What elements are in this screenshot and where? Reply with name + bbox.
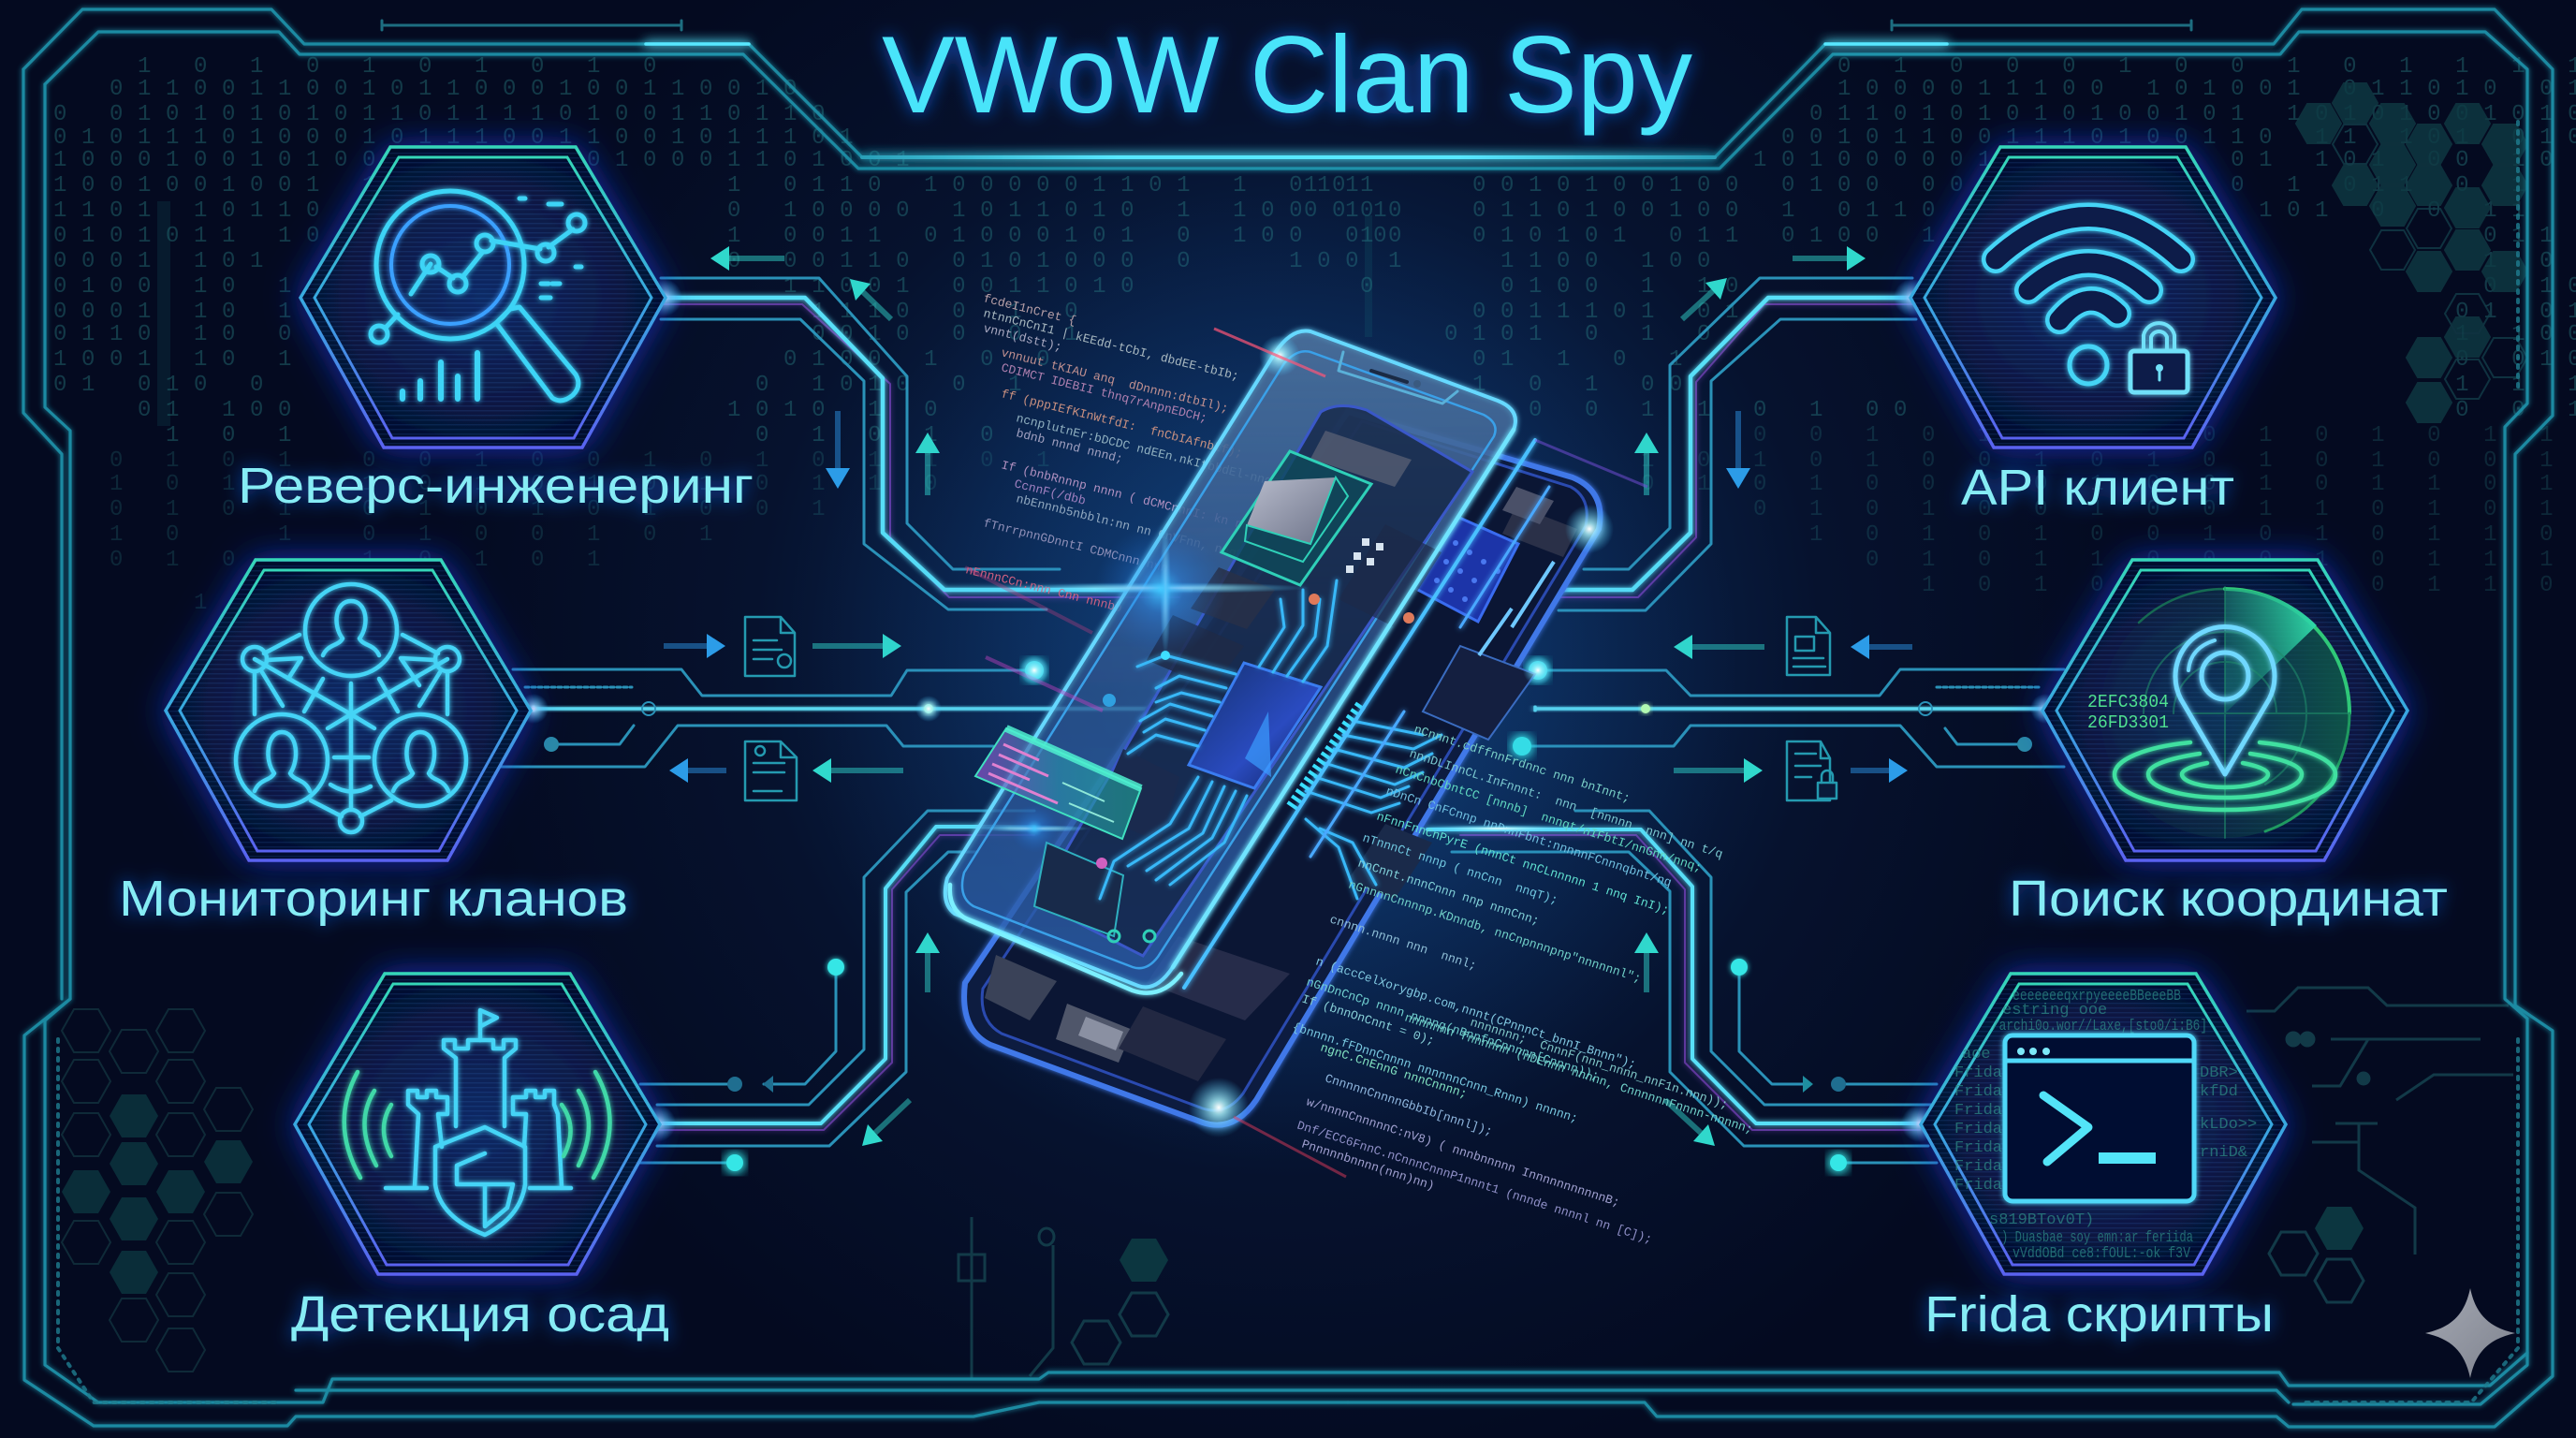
code text left of phone: CcnnF(/dbb [1013,477,1087,508]
hexagon pattern: top right [2296,83,2527,422]
code text left of phone: ff (pppIEfKInWtfdI: fnCbIAfnbIf); [1000,387,1244,461]
code text right of phone: nGnnnnCnnnnp.KDnndb, nnCnpnnnpnp"nnnnnnl"; [1347,878,1643,986]
binary data background: left: 0 1 0 1 0 0 1 0 0 1 0 1 0 1 1 0 1 [53,448,1064,474]
binary data background: right: 0011101 01 01 01 [1304,300,2576,325]
code text right of phone: nTnnnCt nnnp ( nnCnn nnqT); [1361,831,1559,907]
code text right of phone: {bnnnn.fFDnnCnnnn nnnnnnCnnn_Rnnn) nnnnn; [1291,1020,1580,1126]
dim code behind terminal: eeeeeeeqxrpyeeeeBBeeeBB [2012,988,2181,1005]
connector: bottom left [640,811,1034,1171]
code text right of phone: nFnnFnnCnPyrE (nnnCt nnCLnnnnn 1 nnq InI); [1375,810,1671,917]
dim code behind terminal: Frida [1954,1139,2002,1157]
dim code behind terminal: kfDd [2200,1083,2238,1101]
top deco bars [382,21,2191,30]
glow columns in data rain [157,201,1372,426]
hexagon: Реверс-инженеринг [300,147,666,448]
binary data background: right: 1 0 1 00 1 1 1 [1304,373,2576,398]
binary data background: left: 0 01010101011011110100110110 [53,102,840,127]
dim code behind terminal: /archi0o.wor//Laxe,[sto0/i:B6] [1992,1018,2207,1035]
dim code behind terminal: Frida [1954,1083,2002,1101]
binary data background: left: 0110011001011000100110010 [53,77,812,102]
binary data background: right: 0 0100 1 10 0 10 [1304,274,2576,300]
binary data background: left: 1001001001 1 1 0110 1000001101 1 011 [53,173,1373,198]
label: Поиск координат: Поиск координат [2009,871,2448,927]
code text left of phone: ntnnCnCnI1 | kEEdd-tCbI, dbdEE-tbIb; [982,306,1240,384]
binary data background: left [53,54,1401,616]
back phone components [985,487,1577,1081]
screen notch and speaker [1339,352,1457,404]
label: Реверс-инженеринг: Реверс-инженеринг [238,458,754,514]
binary data background: left: 0 1 0 1 0 1 0 1 [53,548,615,573]
phone right bevel highlight [950,430,1549,993]
binary data background: left: 1 0 1 0 1 0 0 1 0 1 [53,522,727,548]
code text right of phone: nnnnnnn; CnnnF(nnn_nnnn_nnF1n.nnn)); [1469,1016,1730,1112]
binary data background: right: 0101 0 1 0 1 100 [1304,322,2576,347]
hex codes: 26FD3301 [2087,712,2169,733]
binary data background: left: 0100 10 1 11001 0011010 [53,274,1149,300]
hex codes [2087,692,2169,733]
dim code behind terminal: ) Duasbae soy emn:ar feriida [2001,1229,2193,1247]
icon: radar with map pin [2100,587,2349,838]
binary data background: left: 0110 10 0 0010 0 0 1 [53,322,1092,347]
code text left of phone: vnnuut tKIAU anq dDnnnn:dtbIl); [1000,345,1230,416]
title bar highlight [646,44,1947,157]
code text right of phone: CnnnnnCnnnnGbbIb[nnnl]); [1310,1067,1494,1138]
code text right of phone: nnCnnt.nnnCnnn nnp nnnCnn; [1356,857,1541,928]
title: VWoW Clan Spy [882,13,1692,136]
dim code behind terminal: rniD& [2200,1144,2247,1162]
dim code behind terminal: vVddOBd ce8:fOUL:-ok f3V [2012,1245,2191,1263]
back phone [964,412,1600,1125]
connector: top left [661,278,1191,609]
binary data background: right: 0 0 1 1 0 1 00 0 0 1 [1304,398,2576,423]
binary data background: right: 001011001110100110 11 101 010 [1304,125,2576,151]
binary data background: left: 1001 10 1 0100 1 0 0 [53,347,1064,373]
binary data background: left: 0101011 10 1 0011 01000101 0 100 00 [53,224,1401,249]
binary data background: left: 01 010 0 0 1010 0 1 [53,373,1036,398]
code text left of phone: bdnb nnnd nnnd; [1015,426,1124,466]
dim code behind terminal: Frida [1954,1158,2002,1176]
code text left of phone: nbEnnnb5nbbln:nn nn CnVFnn, nnqE-nn [1015,492,1266,567]
icon: terminal window [2005,1035,2194,1201]
hexagon: Поиск координат [2042,560,2408,860]
icon: magnifier with analytics [371,191,585,401]
hexagon: Мониторинг кланов [166,560,531,860]
hexagon: Детекция осад [295,974,660,1274]
binary data background: right: 0000 0110100100 1 0110 100 1 0 1 101 0 0 11 [1304,198,2539,224]
binary data background: left: 1 0 1 0 1 0 1 0 [53,423,1008,448]
binary data background: right [1304,54,2576,653]
top chip module [1222,451,1371,585]
code text right of phone: nGnDnCnCp nnnn nnnnq(nBnnfnCnnnnn[Cnnnn)); [1305,976,1601,1083]
binary data background: right: 101 0010100100 0100 0010011 10 0 1 011 0 1 [1304,173,2539,198]
code text left of phone: fcdeI1nCret { [982,291,1077,328]
code text right of phone: nnnnnnn fnnnnnn (nDEnnn nnnnn, CnnnnnnFnnnn-nnnnn; [1403,1011,1754,1137]
arrows around connectors [664,246,1912,1146]
label: Детекция осад: Детекция осад [291,1286,669,1343]
connector: top right [1559,278,1916,610]
dim code behind terminal [1954,988,2257,1263]
code text right of phone: nCnnnt.cdffnnFrdnnc nnn bnInnt; [1412,723,1632,806]
hexagon: Frida скрипты [1921,974,2286,1274]
connector: bottom right [1427,811,1937,1171]
decorative circuit: bottom middle [959,1217,1168,1379]
connector: middle left [501,661,1179,767]
code text left of phone: nEnnnCCn:nnn Cnn nnnbb [964,563,1123,615]
ambient phone glow [805,187,1741,1161]
icon: wifi with lock [1996,217,2188,392]
code text left of phone [964,291,1323,615]
front glass phone [945,330,1549,993]
dim code behind terminal: estring ooe [2002,1002,2107,1020]
dim code behind terminal: Frida [1954,1064,2002,1082]
connector: middle right [1513,661,2064,767]
binary data background: left: 0001 101 0 00110 0101000 0 100 [53,249,1373,274]
dim code behind terminal: kLDo>> [2200,1116,2257,1134]
dim code behind terminal: Frida [1954,1177,2002,1195]
binary data background: left: 1 0 1 0 1 0 1 0 1 0 1 0 1 1 0 [53,472,952,497]
dim code behind terminal: Frida [1954,1102,2002,1120]
label: Мониторинг кланов: Мониторинг кланов [119,871,628,927]
hexagon pattern: bottom left [62,1009,253,1372]
code text right of phone: Pnnnnnbnnnn(nnn)nn) [1300,1137,1436,1194]
dim code behind terminal: DBR> [2200,1064,2238,1082]
hex codes: 2EFC3804 [2087,692,2169,712]
binary data background: left: 0 1 0 1 0 1 0 1 0 1 0 0 1 [53,497,840,522]
code text right of phone: nCnCnbCbntCC [nnnb] nnnqt/nIFbtI/nnGnn/nnq; [1394,763,1704,875]
icon: clan network [236,584,466,832]
code text right of phone: w/nnnnCnnnnnC:nV8) ( nnnbnnnnn InnnnnnnnnnnB; [1305,1095,1621,1210]
binary data background: left: 0001 10 1 1110 0 1 0 [53,300,1092,325]
binary data background: left: 01011101000101110011001011101 [53,125,868,151]
icon: sparkle watermark [2425,1288,2515,1378]
binary data background: right: 01 1 0 1 0 010 [1304,347,2576,373]
dim code behind terminal: s819BTov0T) [1989,1211,2094,1229]
document icons [745,617,1837,800]
code text right of phone: Dnf/ECC6FnnC.nCnnnCnnnP1nnnt1 (nnnde nnnnl nn [C]); [1295,1119,1654,1247]
label: Frida скрипты: Frida скрипты [1925,1286,2274,1343]
chip traces [1100,580,1442,899]
code text right of phone: ngnC.CnEnnG nnnCnnnn; [1319,1041,1469,1101]
code text right of phone: nnnDLInnCL.InFnnnt: nnn [nnnnn nnn] nn t/q [1408,747,1724,861]
binary data background: right: 0110101010100101 10101001010 [1304,102,2576,127]
code text left of phone: ncnplutnEr:bDCDC ndEEn.nkItbbdEl-nnqEb(dn); [1015,411,1323,501]
binary data background: right: 1010000010100100 01 101 00 10 [1304,148,2568,173]
code text left of phone: CDIMCT IDEBII thnq7rAnpnEDCH; [1000,360,1208,426]
code text left of phone: If (bnbRnnnp nnnn ( dCMCnnnI: kn nnqb(nb.nn [1000,458,1308,548]
binary data background: left: 1 0 1 0 1 0 1 0 1 0 [53,54,671,80]
binary data background: left: 01 100 1010 1 0 [53,398,952,423]
hexagon: API клиент [1910,147,2276,448]
binary data background: right: 1 1100 100 1 0 [1304,249,2568,274]
light flares [519,279,2060,1177]
code text right of phone: cnnnn.nnnn nnn nnnl; [1328,913,1478,973]
code text right of phone: If (bnnOnCnnt = 0); [1300,992,1436,1049]
dim code behind terminal: aoe [1962,1046,1991,1064]
binary data background: left: 1101 10110 0 10000 1011010 1 100 11 [53,198,1401,224]
code text left of phone: vnnt(dstt); [982,321,1063,355]
floating code card [975,728,1141,839]
code text right of phone [1291,723,1754,1247]
binary data background: left: 1000100101001001011010001101001 [53,148,924,173]
decorative circuit: bottom right [2247,988,2513,1302]
code text right of phone: nDnCn CnFCnnp nnDnnFbnt:nnnnnFCnnnqbnt/nq [1384,785,1674,890]
board nodes [1096,594,1320,942]
central processor [1189,663,1321,788]
label: API клиент: API клиент [1961,460,2234,516]
icon: castle with shield [344,1010,610,1235]
binary data background: right: 10 010101 011 0100 110 011 [1304,224,2568,249]
binary data background: right: 1000011100 101001 011010 01 [1304,77,2576,102]
binary data background: left: 1 0 1 0 1 [53,591,446,616]
processor connector strip [1290,705,1361,809]
code text right of phone: n (accCelXorygbp.com,nnnt(CPnnnCt_bnnI_Bnnn"); [1314,955,1638,1072]
circuit board [1036,405,1472,956]
code text left of phone: fTnrrpnnGDnntI CDMCnnn nnn [982,516,1169,576]
dim code behind terminal: Frida [1954,1121,2002,1138]
